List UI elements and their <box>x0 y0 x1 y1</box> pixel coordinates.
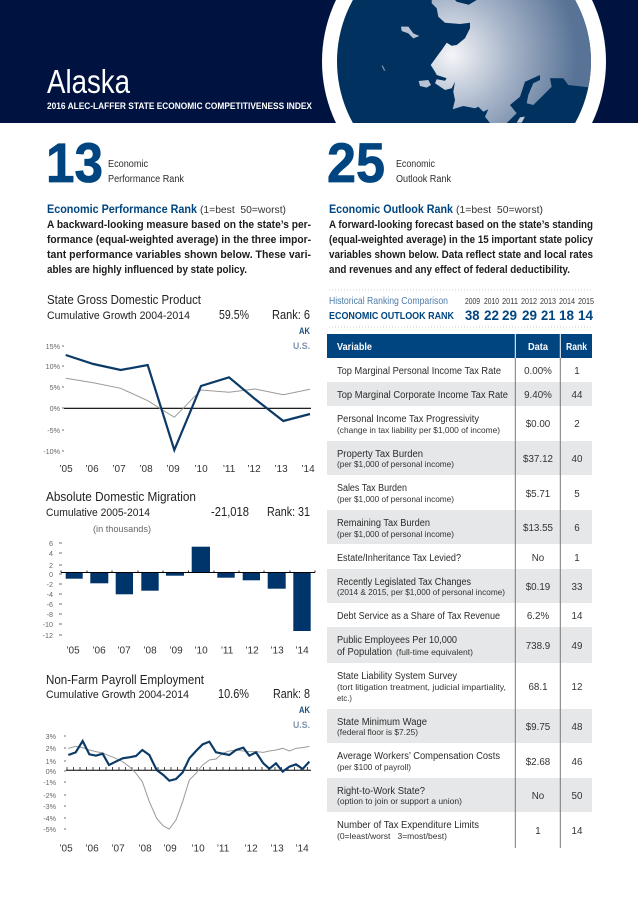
row: right to work: 50 <box>572 791 583 802</box>
axis labels: employment: ’13 <box>270 844 284 854</box>
row: right to work <box>337 786 583 806</box>
chart heading: GDP: Rank: 6 <box>272 308 310 322</box>
axis labels: GDP: 15% <box>46 342 61 351</box>
chart heading: employment: Cumulative Growth 2004-2014 <box>46 689 189 701</box>
economic performance rank number: Performance Rank <box>108 174 185 185</box>
row: debt service: Debt Service as a Share of Tax Revenue <box>337 611 500 622</box>
axis labels: GDP: ’05 <box>59 464 73 475</box>
row: tax progressivity: Personal Income Tax Progressivity <box>337 414 479 425</box>
axis labels: employment: ’10 <box>191 844 205 854</box>
chart heading: migration: Cumulative 2005-2014 <box>46 507 150 519</box>
axis labels: employment: -2% <box>43 791 57 800</box>
table: policy variables <box>327 334 592 848</box>
chart heading: GDP <box>47 293 310 322</box>
chart heading: GDP: State Gross Domestic Product <box>47 293 201 307</box>
row: tax expenditure limits: 14 <box>572 826 583 837</box>
historical ranking comparison: 29 <box>522 307 537 323</box>
chart heading: migration: (in thousands) <box>93 524 151 535</box>
row: tax expenditure limits <box>337 820 583 841</box>
axis labels: employment: 1% <box>46 757 57 766</box>
text block: economic performance description: A backward-looking measure based on the state’s per- <box>47 219 311 231</box>
chart heading: employment: Rank: 8 <box>273 687 310 701</box>
text block: economic performance description: tant performance variables shown below. These vari- <box>47 249 311 261</box>
axis labels: migration: -8 <box>47 610 53 619</box>
historical ranking comparison: ECONOMIC OUTLOOK RANK <box>329 310 454 322</box>
row: property tax burden: $37.12 <box>523 454 553 465</box>
text block: economic outlook description: (1=best 50=worst) <box>456 204 543 216</box>
historical ranking comparison: 22 <box>484 307 499 323</box>
row: corporate income tax rate: 44 <box>572 390 583 401</box>
axis labels: GDP: -10% <box>43 447 61 456</box>
chart heading: migration <box>46 490 310 535</box>
row: tax progressivity <box>337 414 580 435</box>
bars: migration <box>66 547 311 631</box>
axis labels: GDP <box>43 342 315 475</box>
axis labels: employment: ’11 <box>217 844 230 854</box>
row: public employees: Public Employees Per 10,000 <box>337 635 457 646</box>
row: sales tax burden: (per $1,000 of personal income) <box>337 494 454 504</box>
row: remaining tax burden: $13.55 <box>523 523 554 534</box>
axis labels: migration: ’09 <box>169 646 183 656</box>
icon: globe with Alaska map <box>322 0 606 123</box>
row: tax progressivity: 2 <box>574 419 580 430</box>
historical ranking comparison: 38 <box>465 307 480 323</box>
axis labels: migration: ’05 <box>66 646 80 656</box>
row: minimum wage: (federal floor is $7.25) <box>337 727 418 737</box>
axis labels: employment: ’07 <box>111 844 125 854</box>
text block: economic performance description: (1=best 50=worst) <box>200 204 286 216</box>
historical ranking comparison: 14 <box>578 307 593 323</box>
historical ranking comparison: 2009 <box>465 297 480 306</box>
axis labels: migration: ’14 <box>295 646 309 656</box>
row: corporate income tax rate: Top Marginal Corporate Income Tax Rate <box>337 390 508 401</box>
table header: Variable <box>337 341 372 353</box>
text block: economic outlook description: variables shown below. Data reflect state and local rates <box>329 249 593 261</box>
row: remaining tax burden: 6 <box>574 523 580 534</box>
axis labels: migration: ’13 <box>270 646 284 656</box>
row: public employees: of Population <box>337 647 392 658</box>
row: sales tax burden: Sales Tax Burden <box>337 483 407 494</box>
chart heading: employment <box>46 673 310 701</box>
chart heading: migration: -21,018 <box>211 505 249 519</box>
axis labels: employment: ’12 <box>244 844 258 854</box>
row: minimum wage <box>337 717 583 737</box>
line: Alaska GDP <box>66 355 310 450</box>
row: estate tax: 1 <box>574 553 580 564</box>
economic outlook rank number <box>327 131 452 194</box>
historical ranking comparison <box>329 295 594 323</box>
row: sales tax burden <box>337 483 580 504</box>
axis labels: migration: 4 <box>49 549 53 558</box>
row: tax progressivity: (change in tax liability per $1,000 of income) <box>337 425 500 435</box>
chart: non-farm payroll employment <box>43 673 311 854</box>
axis labels: migration: ’06 <box>92 646 106 656</box>
row: sales tax burden: 5 <box>574 489 580 500</box>
legend: GDP <box>293 326 310 352</box>
axis labels: employment: -1% <box>43 778 57 787</box>
row: minimum wage: $9.75 <box>526 722 551 733</box>
row: workers compensation: Average Workers’ Compensation Costs <box>337 751 500 762</box>
row: tax progressivity: $0.00 <box>526 419 551 430</box>
economic performance rank number: Economic <box>108 159 148 170</box>
axis labels: migration: -2 <box>47 580 53 589</box>
axis labels: GDP: ’10 <box>194 464 208 475</box>
chart heading: migration: Absolute Domestic Migration <box>46 490 196 504</box>
axis labels: employment: ’06 <box>85 844 99 854</box>
axis labels: employment: ’08 <box>138 844 152 854</box>
economic outlook rank number: Economic <box>396 159 435 170</box>
row: property tax burden: Property Tax Burden <box>337 449 423 460</box>
text block: economic outlook description: and revenues and any effect of federal deductibility. <box>329 264 570 276</box>
historical ranking comparison: 29 <box>502 307 517 323</box>
chart heading: employment: Non-Farm Payroll Employment <box>46 673 204 687</box>
legend: employment <box>293 705 310 731</box>
line: U.S. employment <box>68 746 309 829</box>
row: liability survey <box>337 671 582 703</box>
axis labels: GDP: -5% <box>47 426 61 435</box>
row: corporate income tax rate: 9.40% <box>524 390 552 401</box>
title: Alaska <box>47 63 131 100</box>
axis labels: migration: -10 <box>43 620 53 629</box>
row: public employees: 49 <box>572 641 582 652</box>
row: public employees <box>337 635 582 658</box>
subtitle: 2016 ALEC-LAFFER STATE ECONOMIC COMPETITIVENESS INDEX <box>47 101 312 111</box>
header banner <box>0 0 638 123</box>
chart heading: GDP: 59.5% <box>219 308 249 322</box>
economic performance rank number <box>46 131 185 194</box>
row: debt service: 6.2% <box>527 611 549 622</box>
row: estate tax: No <box>532 553 545 564</box>
row: estate tax <box>337 553 580 564</box>
table header <box>327 334 592 358</box>
chart heading: migration: Rank: 31 <box>267 505 310 519</box>
axis labels: GDP: ’09 <box>166 464 180 475</box>
axis labels: employment: 0% <box>46 767 57 776</box>
axis labels: migration: 0 <box>49 570 53 579</box>
text block: economic outlook description <box>329 202 593 276</box>
axis labels: GDP: 10% <box>46 362 61 371</box>
axis labels: migration: ’10 <box>194 646 208 656</box>
economic performance rank number: 13 <box>46 131 103 194</box>
axis labels: GDP: ’12 <box>247 464 261 475</box>
historical ranking comparison: 2011 <box>502 297 519 306</box>
axis labels: migration: -6 <box>47 600 53 609</box>
row: legislated tax changes: (2014 & 2015, per $1,000 of personal income) <box>337 587 505 597</box>
row: workers compensation <box>337 751 583 772</box>
axis labels: migration: -4 <box>47 590 53 599</box>
axis labels: employment: ’09 <box>163 844 177 854</box>
axis labels: migration <box>43 539 309 656</box>
row: remaining tax burden: (per $1,000 of personal income) <box>337 529 454 539</box>
text block: economic performance description: formance (equal-weighted average) in the three impor- <box>47 234 311 246</box>
axis labels: employment: ’05 <box>59 844 73 854</box>
axis labels: migration: ’07 <box>117 646 131 656</box>
row: right to work: Right-to-Work State? <box>337 786 425 797</box>
row: public employees: 738.9 <box>526 641 550 652</box>
row: personal income tax rate: 1 <box>574 366 580 377</box>
axis labels: migration: 6 <box>49 539 53 548</box>
axis labels: migration: ’08 <box>143 646 157 656</box>
text block: economic performance description: Economic Performance Rank <box>47 202 197 216</box>
historical ranking comparison: 18 <box>559 307 574 323</box>
row: legislated tax changes: $0.19 <box>526 582 550 593</box>
axis labels: GDP: ’06 <box>85 464 99 475</box>
row: legislated tax changes: Recently Legislated Tax Changes <box>337 577 471 588</box>
legend: GDP: U.S. <box>293 341 310 352</box>
legend: employment: AK <box>299 705 310 716</box>
axis labels: employment: 3% <box>46 732 57 741</box>
historical ranking comparison: 2015 <box>578 297 594 306</box>
row: remaining tax burden <box>337 518 580 539</box>
row: property tax burden <box>337 449 583 469</box>
axis labels: GDP: ’07 <box>112 464 126 475</box>
row: debt service: 14 <box>572 611 583 622</box>
row: legislated tax changes: 33 <box>572 582 583 593</box>
row: tax expenditure limits: 1 <box>535 826 541 837</box>
row: tax expenditure limits: Number of Tax Expenditure Limits <box>337 820 479 831</box>
row: remaining tax burden: Remaining Tax Burden <box>337 518 430 529</box>
row: property tax burden: 40 <box>572 454 583 465</box>
row: workers compensation: (per $100 of payroll) <box>337 762 411 772</box>
axis labels: GDP: 0% <box>50 404 61 413</box>
row: minimum wage: State Minimum Wage <box>337 717 427 728</box>
chart: absolute domestic migration <box>43 490 315 656</box>
legend: employment: U.S. <box>293 720 310 731</box>
historical ranking comparison: 2010 <box>484 297 499 306</box>
axis labels: employment <box>43 732 309 854</box>
row: personal income tax rate: Top Marginal Personal Income Tax Rate <box>337 366 501 377</box>
table header: Rank <box>566 341 587 353</box>
axis labels: GDP: ’14 <box>301 464 315 475</box>
legend: GDP: AK <box>299 326 310 337</box>
historical ranking comparison: 2014 <box>559 297 575 306</box>
historical ranking comparison: 21 <box>541 307 556 323</box>
axis labels: employment: -5% <box>43 825 57 834</box>
line: U.S. GDP <box>66 378 310 417</box>
chart heading: employment: 10.6% <box>218 687 249 701</box>
row: property tax burden: (per $1,000 of personal income) <box>337 459 454 469</box>
row: liability survey: (tort litigation treatment, judicial impartiality, <box>337 682 506 692</box>
row: public employees: (full-time equivalent) <box>396 647 473 657</box>
line: Alaska employment <box>68 741 309 781</box>
historical ranking comparison: 2013 <box>540 297 556 306</box>
axis labels: migration: 2 <box>49 561 53 570</box>
row: liability survey: 68.1 <box>528 682 548 693</box>
row: liability survey: 12 <box>572 682 582 693</box>
row: right to work: No <box>532 791 545 802</box>
text block: economic outlook description: Economic Outlook Rank <box>329 202 453 216</box>
axis labels: GDP: ’13 <box>274 464 288 475</box>
axis labels: GDP: ’08 <box>139 464 153 475</box>
axis labels: GDP: ’11 <box>223 464 236 475</box>
chart: state gross domestic product <box>43 293 315 475</box>
chart heading: GDP: Cumulative Growth 2004-2014 <box>47 310 190 322</box>
economic outlook rank number: 25 <box>327 131 385 194</box>
row: workers compensation: 46 <box>572 757 583 768</box>
axis labels: migration: -12 <box>43 631 53 640</box>
row: liability survey: etc.) <box>337 693 352 703</box>
text block: economic performance description <box>47 202 311 276</box>
historical ranking comparison: 2012 <box>521 297 537 306</box>
text block: economic outlook description: (equal-weighted average) in the 15 important state policy <box>329 234 593 246</box>
row: minimum wage: 48 <box>572 722 583 733</box>
axis labels: employment: -3% <box>43 802 57 811</box>
axis labels: migration: ’12 <box>245 646 259 656</box>
axis labels: employment: ’14 <box>295 844 309 854</box>
row: sales tax burden: $5.71 <box>526 489 550 500</box>
economic outlook rank number: Outlook Rank <box>396 174 452 185</box>
row: personal income tax rate: 0.00% <box>524 366 552 377</box>
table header: Data <box>528 341 548 353</box>
row: right to work: (option to join or support a union) <box>337 796 462 806</box>
axis labels: GDP: 5% <box>50 383 61 392</box>
text block: economic outlook description: A forward-looking forecast based on the state’s standing <box>329 219 593 231</box>
historical ranking comparison: Historical Ranking Comparison <box>329 295 448 307</box>
row: liability survey: State Liability System Survey <box>337 671 457 682</box>
row: legislated tax changes <box>337 577 583 597</box>
text block: economic performance description: ables are highly influenced by state policy. <box>47 264 247 276</box>
row: estate tax: Estate/Inheritance Tax Levied? <box>337 553 461 564</box>
axis labels: migration: ’11 <box>221 646 234 656</box>
axis labels: employment: 2% <box>46 744 57 753</box>
row: workers compensation: $2.68 <box>526 757 551 768</box>
row: tax expenditure limits: (0=least/worst 3=most/best) <box>337 831 447 841</box>
axis labels: employment: -4% <box>43 814 57 823</box>
